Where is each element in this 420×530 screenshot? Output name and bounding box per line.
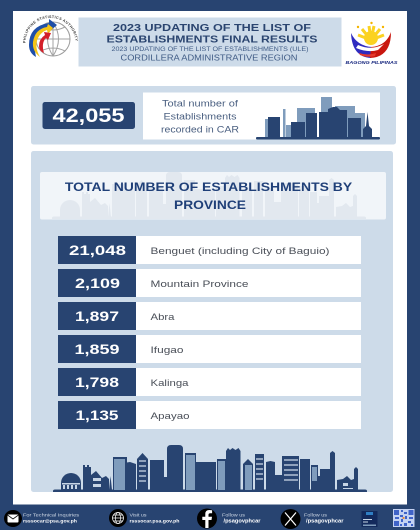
logo caption: BAGONG PILIPINAS	[346, 60, 398, 66]
panel: regional total	[31, 86, 396, 144]
contact: website: rsssocar.psa.gov.ph	[130, 518, 180, 524]
total description card: Establishments	[164, 112, 237, 122]
header title: ESTABLISHMENTS FINAL RESULTS	[106, 34, 318, 46]
illustration: city skyline	[256, 97, 380, 140]
contact: X: /psagovphcar	[306, 518, 344, 524]
total value badge	[42, 102, 135, 129]
publication thumbnail	[362, 511, 378, 527]
province row: Abra: Abra	[150, 312, 175, 323]
province row: Apayao: Apayao	[150, 411, 190, 422]
logo: Philippine Statistics Authority seal: PHILIPPINE STATISTICS AUTHORITY	[23, 15, 78, 43]
total value badge: 42,055	[52, 106, 125, 127]
province row: Mountain Province: 2,109	[75, 275, 120, 291]
province row: Kalinga: 1,798	[75, 374, 119, 390]
contact: Facebook: /psagovphcar	[224, 518, 261, 524]
contact: X: Follow us	[304, 512, 328, 518]
icon: globe	[109, 509, 127, 527]
section heading card: TOTAL NUMBER OF ESTABLISHMENTS BY	[65, 182, 353, 194]
total description card: Total number of	[162, 98, 239, 108]
header subtitle: 2023 UPDATING OF THE LIST OF ESTABLISHMENTS (ULE)	[112, 46, 308, 53]
province row: Ifugao	[58, 335, 361, 363]
total description card	[143, 92, 380, 140]
illustration: bottom city skyline	[53, 445, 367, 492]
section heading card	[40, 172, 386, 220]
contact: technical inquiries: rsssocar@psa.gov.ph	[23, 518, 77, 524]
province row: Benguet	[58, 236, 361, 264]
province row: Mountain Province	[58, 269, 361, 297]
header title: 2023 UPDATING OF THE LIST OF	[113, 22, 312, 34]
province row: Abra	[58, 302, 361, 330]
province row: Apayao	[58, 401, 361, 429]
province row: Mountain Province: Mountain Province	[150, 279, 248, 290]
header title	[106, 22, 318, 46]
province row: Benguet: Benguet (including City of Baguio)	[150, 246, 330, 257]
header banner	[78, 18, 342, 66]
footer contact bar	[4, 508, 414, 529]
province row: Abra: 1,897	[75, 308, 119, 324]
region name: CORDILLERA ADMINISTRATIVE REGION	[120, 54, 298, 62]
contact: Facebook: Follow us	[222, 512, 246, 518]
contact: technical inquiries	[4, 510, 80, 527]
icon: Facebook	[197, 508, 217, 528]
province row: Kalinga	[58, 368, 361, 396]
total description card: recorded in CAR	[161, 124, 240, 134]
province row: Apayao: 1,135	[76, 407, 119, 423]
QR code	[393, 509, 414, 527]
logo: Bagong Pilipinas	[346, 22, 398, 66]
icon: envelope	[4, 510, 22, 527]
panel: establishments by province	[31, 151, 393, 492]
province row: Ifugao: 1,859	[74, 341, 120, 357]
contact: Facebook	[197, 508, 261, 528]
contact: website: Visit us	[130, 512, 147, 518]
contact: website	[109, 509, 180, 527]
logo: Philippine Statistics Authority seal	[23, 15, 78, 57]
contact: X	[280, 509, 344, 529]
contact: technical inquiries: For Technical Inquiries	[23, 512, 80, 518]
section heading card: PROVINCE	[174, 200, 246, 212]
province row: Benguet: 21,048	[69, 242, 126, 258]
province row: Kalinga: Kalinga	[150, 378, 189, 389]
province row: Ifugao: Ifugao	[150, 345, 184, 356]
icon: X	[280, 509, 300, 529]
decorative faint skyline	[52, 172, 366, 219]
